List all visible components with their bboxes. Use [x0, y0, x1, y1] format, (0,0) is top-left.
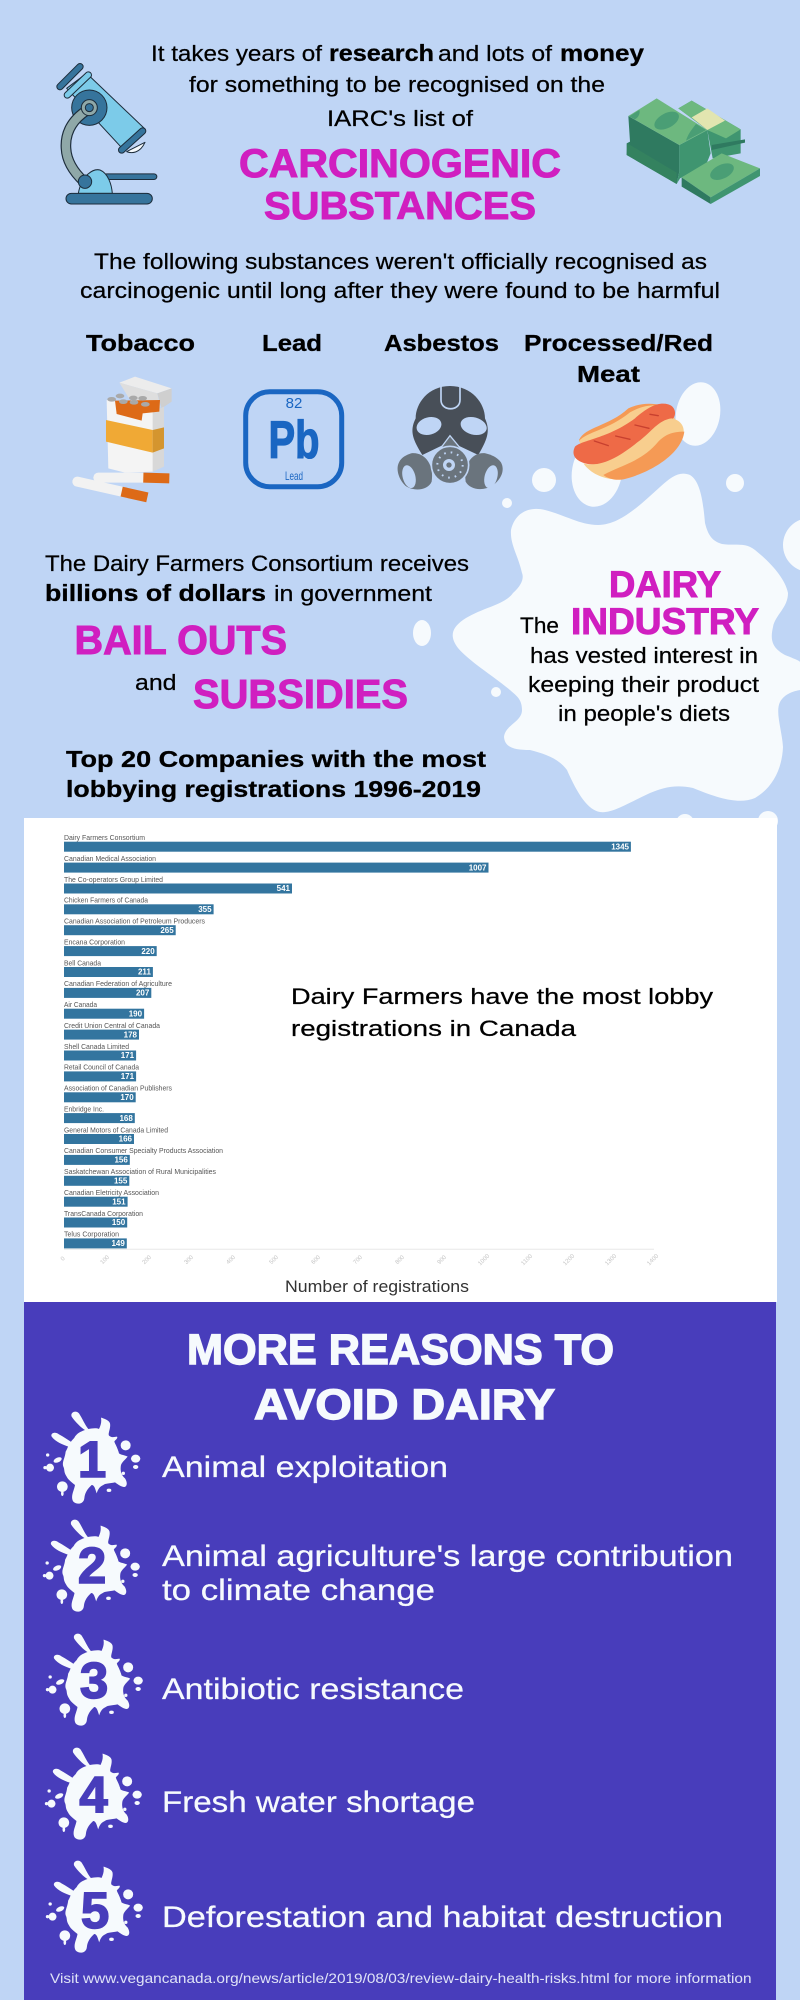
chart annotation: Dairy Farmers have the most lobby — [291, 984, 714, 1009]
bar values: 541 — [277, 884, 291, 893]
company labels: Canadian Consumer Specialty Products Association — [64, 1146, 223, 1155]
reason 2: 2 — [78, 1537, 106, 1594]
heading: lead: Lead — [262, 330, 322, 356]
heading: processed/red meat: Processed/Red — [524, 330, 713, 356]
intro text — [151, 40, 644, 131]
icon: lead periodic table tile — [246, 392, 342, 487]
panel: more reasons to avoid dairy — [24, 1302, 776, 2000]
bar values: 150 — [112, 1218, 126, 1227]
reason 4: Fresh water shortage — [162, 1786, 475, 1819]
reason 5 — [46, 1861, 723, 1953]
company labels: Retail Council of Canada — [64, 1063, 140, 1072]
title: carcinogenic substances: CARCINOGENIC — [239, 142, 561, 186]
text: dairy farmers consortium funding: in government — [274, 581, 433, 606]
heading: subsidies: SUBSIDIES — [193, 671, 408, 717]
heading: top 20 companies: Top 20 Companies with the most — [66, 746, 486, 772]
company labels: Credit Union Central of Canada — [64, 1021, 161, 1030]
bar values: 178 — [124, 1030, 138, 1039]
text: and: and — [135, 670, 176, 695]
panel: lobbying bar chart — [24, 818, 777, 1302]
reason 1 — [43, 1412, 448, 1504]
x axis: 500 — [269, 1254, 280, 1266]
intro text: It takes years of — [151, 41, 323, 66]
intro text: for something to be recognised on the — [189, 72, 605, 97]
reason 4: 4 — [79, 1766, 108, 1823]
company labels: Bell Canada — [64, 958, 102, 967]
reason 3: 3 — [80, 1652, 108, 1709]
company labels: Shell Canada Limited — [64, 1042, 129, 1051]
icon: lead periodic table tile: Pb — [268, 411, 320, 470]
callout: dairy industry: has vested interest in — [530, 643, 758, 668]
text: dairy farmers consortium funding — [45, 551, 469, 606]
intro text: research — [329, 40, 434, 66]
bar values: 190 — [129, 1009, 143, 1018]
company labels — [64, 833, 223, 1239]
bar values: 171 — [121, 1051, 135, 1060]
icon: stacks of money — [627, 98, 760, 204]
company labels: Encana Corporation — [64, 937, 125, 946]
intro text: IARC's list of — [327, 106, 474, 131]
reason 2: to climate change — [162, 1574, 435, 1607]
heading: more reasons: MORE REASONS TO — [187, 1326, 614, 1374]
callout: dairy industry: keeping their product — [528, 672, 760, 697]
company labels: Canadian Association of Petroleum Producers — [64, 916, 205, 926]
bar values: 1007 — [469, 863, 487, 872]
x axis: 1000 — [477, 1253, 492, 1267]
x axis: 300 — [184, 1254, 195, 1266]
company labels: Dairy Farmers Consortium — [64, 833, 145, 842]
bar values: 355 — [198, 905, 212, 914]
icon: microscope — [60, 67, 154, 204]
bar values: 166 — [119, 1135, 133, 1144]
x axis: 1400 — [646, 1253, 661, 1267]
company labels: General Motors of Canada Limited — [64, 1125, 168, 1134]
reason 5: Deforestation and habitat destruction — [162, 1901, 723, 1934]
title: carcinogenic substances — [239, 142, 561, 228]
company labels: The Co-operators Group Limited — [64, 875, 163, 884]
intro text: money — [560, 40, 644, 66]
x axis — [60, 1249, 661, 1267]
heading: tobacco: Tobacco — [86, 330, 195, 356]
callout: dairy industry: INDUSTRY — [571, 601, 759, 642]
reason 2: Animal agriculture's large contribution — [162, 1540, 733, 1573]
axis title: Number of registrations — [285, 1278, 469, 1296]
company labels: Telus Corporation — [64, 1230, 119, 1239]
reason 1: Animal exploitation — [162, 1451, 448, 1484]
x axis: 700 — [353, 1254, 364, 1266]
x axis: 600 — [311, 1254, 322, 1266]
heading: more reasons — [187, 1326, 614, 1429]
bar values: 220 — [141, 947, 155, 956]
chart annotation — [291, 984, 714, 1041]
x axis: 1100 — [521, 1253, 534, 1267]
icon: cigarette pack — [77, 377, 172, 497]
bar values: 170 — [120, 1093, 134, 1102]
bar rows — [64, 842, 631, 1248]
x axis: 200 — [142, 1254, 153, 1266]
icon: lead periodic table tile: 82 — [286, 395, 302, 412]
x axis: 1200 — [562, 1253, 577, 1267]
bar values: 207 — [136, 989, 150, 998]
bar values: 171 — [121, 1072, 135, 1081]
bar values — [111, 842, 630, 1248]
reason 5: 5 — [81, 1882, 109, 1939]
text: dairy farmers consortium funding: The Dairy Farmers Consortium receives — [45, 551, 469, 576]
x axis: 900 — [437, 1254, 448, 1266]
reason 1: 1 — [78, 1431, 106, 1488]
icon: hot dog — [573, 404, 684, 480]
x axis: 0 — [60, 1256, 67, 1263]
x axis: 100 — [100, 1254, 111, 1266]
company labels: TransCanada Corporation — [64, 1209, 143, 1218]
title: carcinogenic substances: SUBSTANCES — [264, 185, 536, 228]
bar values: 155 — [114, 1176, 128, 1186]
heading: processed/red meat: Meat — [577, 361, 640, 387]
callout: dairy industry: in people's diets — [558, 701, 730, 726]
footer source: Visit www.vegancanada.org/news/article/2019/08/03/review-dairy-health-risks.html for more information — [50, 1970, 751, 1986]
company labels: Enbridge Inc. — [64, 1104, 104, 1113]
reason 3: Antibiotic resistance — [162, 1673, 464, 1706]
callout: dairy industry: The — [520, 613, 559, 638]
company labels: Association of Canadian Publishers — [64, 1084, 172, 1093]
company labels: Saskatchewan Association of Rural Municipalities — [64, 1167, 216, 1176]
reason 2 — [43, 1520, 733, 1612]
text: dairy farmers consortium funding: billions of dollars — [45, 580, 266, 606]
reason 3 — [46, 1634, 464, 1726]
reason 4 — [45, 1748, 475, 1840]
bar values: 1345 — [611, 842, 630, 851]
bar values: 151 — [112, 1197, 126, 1206]
company labels: Canadian Federation of Agriculture — [64, 979, 172, 988]
bar values: 211 — [138, 968, 151, 977]
company labels: Chicken Farmers of Canada — [64, 896, 149, 905]
company labels: Air Canada — [64, 1000, 98, 1009]
bar values: 149 — [111, 1239, 125, 1248]
heading: processed/red meat — [524, 330, 713, 387]
x axis: 800 — [395, 1254, 406, 1266]
bar values: 265 — [160, 926, 174, 935]
callout: dairy industry — [520, 564, 760, 726]
icon: gas mask — [398, 386, 503, 490]
company labels: Canadian Eletricity Association — [64, 1188, 159, 1197]
heading: top 20 companies — [66, 746, 486, 802]
company labels: Canadian Medical Association — [64, 854, 156, 863]
icon: lead periodic table tile: Lead — [285, 469, 303, 483]
heading: asbestos: Asbestos — [384, 330, 499, 356]
intro text: and lots of — [438, 41, 553, 66]
text: the following substances: The following substances weren't officially recognised as — [94, 249, 707, 274]
x axis: 400 — [226, 1254, 237, 1266]
x axis: 1300 — [604, 1253, 619, 1267]
heading: more reasons: AVOID DAIRY — [254, 1381, 555, 1429]
bar values: 156 — [114, 1156, 128, 1165]
heading: top 20 companies: lobbying registrations 1996-2019 — [66, 776, 481, 802]
callout: dairy industry: DAIRY — [609, 564, 721, 605]
milk splash background — [413, 379, 800, 832]
chart annotation: registrations in Canada — [291, 1016, 577, 1041]
text: the following substances: carcinogenic until long after they were found to be harmful — [80, 278, 720, 303]
heading: bail outs: BAIL OUTS — [74, 617, 287, 663]
bar values: 168 — [119, 1114, 133, 1123]
text: the following substances — [80, 249, 720, 303]
